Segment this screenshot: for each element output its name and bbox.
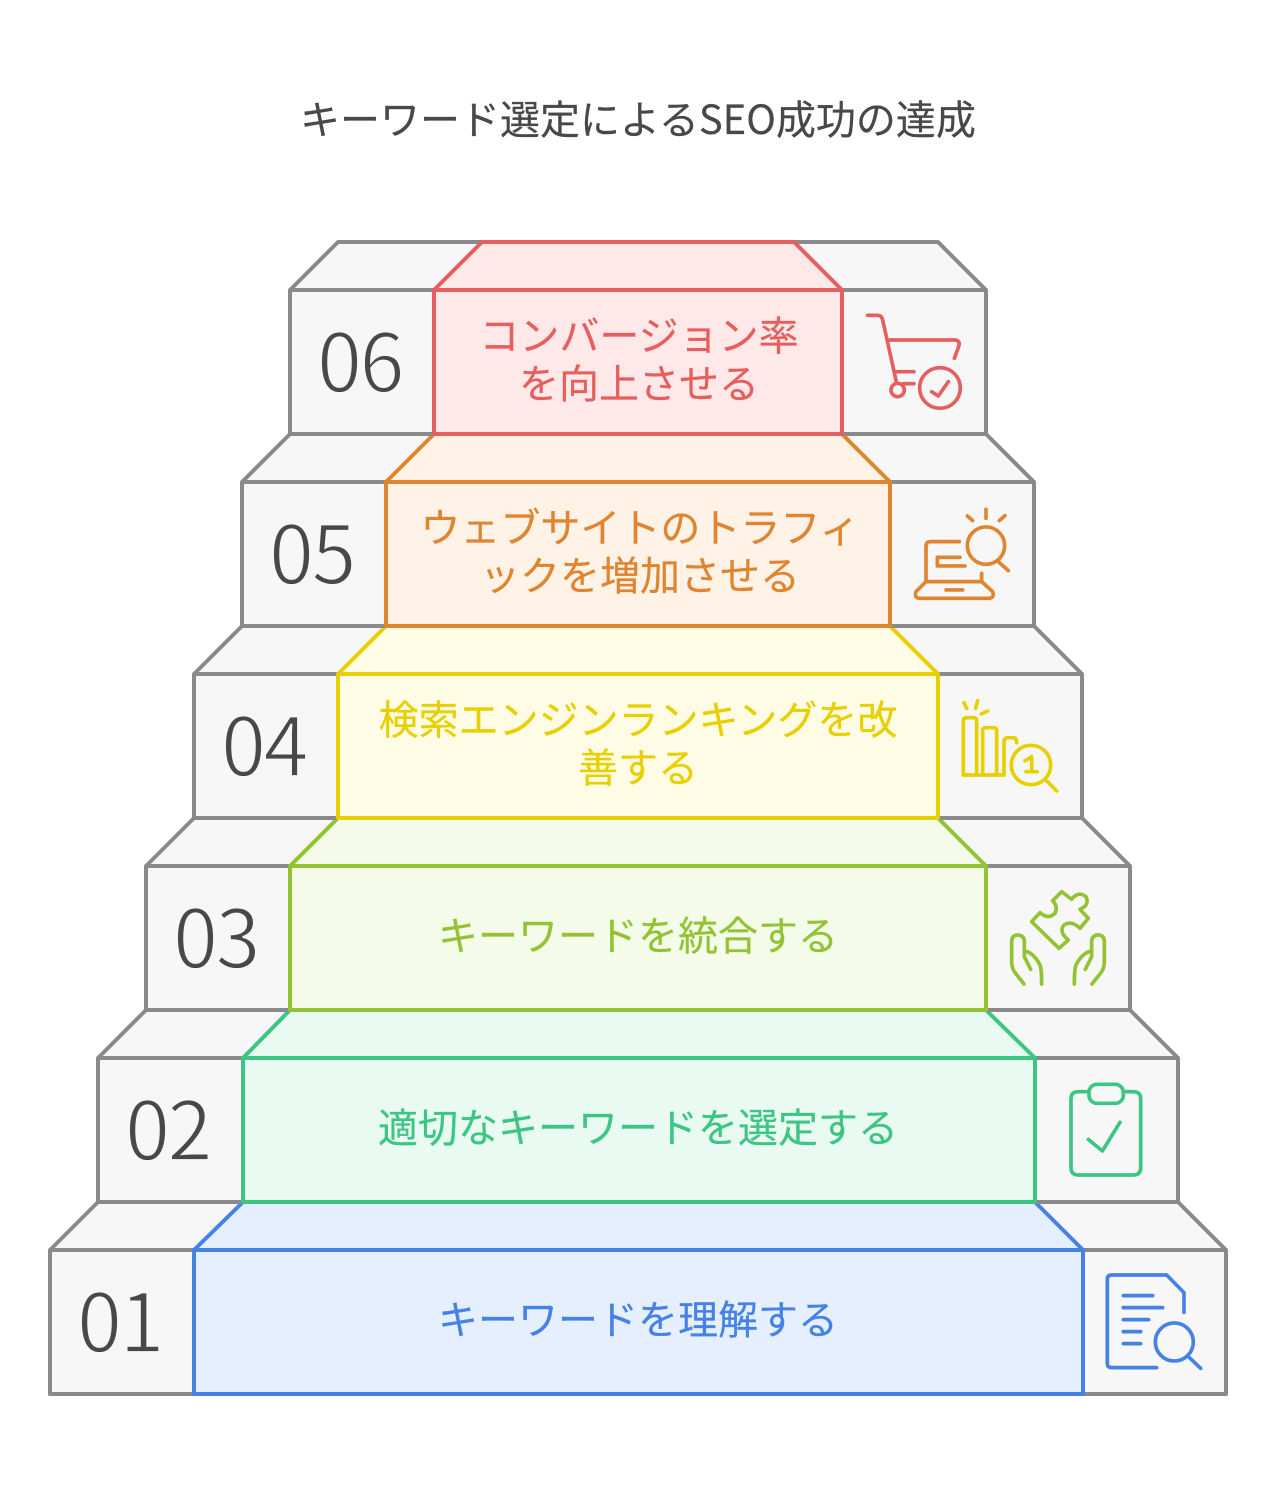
step 04 label: 検索エンジンランキングを改 (379, 688, 897, 746)
panel: step 05 (242, 434, 1034, 626)
step 05 label line 2: ックを増加させる (480, 544, 800, 602)
title: キーワード選定によるSEO成功の達成 (300, 88, 976, 146)
step 01 coloured block (194, 1202, 1083, 1394)
step 04 label line 2: 善する (578, 736, 698, 794)
step 03 coloured block (290, 818, 986, 1010)
step 02 coloured block (243, 1010, 1035, 1202)
step 06 label line 2: を向上させる (519, 352, 759, 410)
step 03 label: キーワードを統合する (438, 904, 838, 962)
step 02 number: 02 (125, 1067, 210, 1184)
step 02 label: 適切なキーワードを選定する (378, 1096, 898, 1154)
step 03 number: 03 (173, 875, 258, 992)
step 06 number: 06 (317, 299, 402, 416)
step 04 grey block (194, 626, 1082, 818)
icon: clipboard check (1071, 1084, 1141, 1175)
icon: puzzle and hands (1012, 892, 1104, 984)
step 04 coloured block (338, 626, 938, 818)
step 02 grey block (98, 1010, 1178, 1202)
step 01 label: キーワードを理解する (438, 1288, 838, 1346)
step 05 coloured block (386, 434, 890, 626)
panel: step 02 (98, 1010, 1178, 1202)
icon: laptop search (915, 509, 1008, 598)
step 01 grey block (50, 1202, 1226, 1394)
panel: step 01 (50, 1202, 1226, 1394)
panel: step 04 (194, 626, 1082, 818)
step 03 grey block (146, 818, 1130, 1010)
icon: document search (1107, 1275, 1201, 1368)
icon: cart check (868, 315, 960, 408)
step 06 grey block (290, 242, 986, 434)
panel: step 06 (290, 242, 986, 434)
step 06 label: コンバージョン率 (479, 304, 799, 362)
step 04 number: 04 (221, 683, 306, 800)
step 05 number: 05 (269, 491, 354, 608)
step 06 coloured block (434, 242, 842, 434)
step 05 label: ウェブサイトのトラフィ (420, 496, 860, 554)
step 05 grey block (242, 434, 1034, 626)
icon: ranking search (963, 701, 1057, 791)
step 01 number: 01 (77, 1259, 162, 1376)
panel: step 03 (146, 818, 1130, 1010)
